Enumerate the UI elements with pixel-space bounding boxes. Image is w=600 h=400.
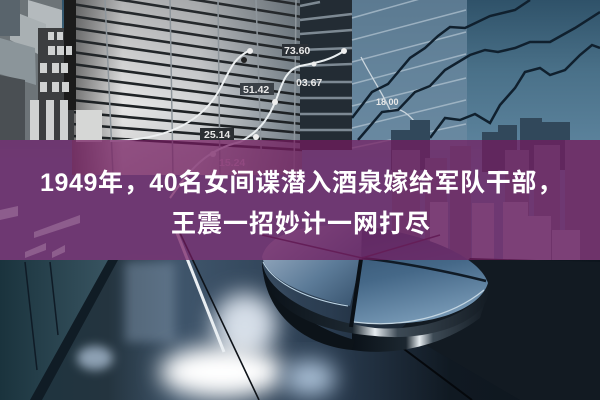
- left stacked panels: [0, 0, 102, 142]
- band left step bars: [0, 206, 80, 258]
- title band: [0, 140, 600, 260]
- background: dark column grid: [300, 0, 467, 150]
- white line chart with value labels: [110, 44, 424, 198]
- white line chart with value labels: 03.67: [296, 77, 322, 89]
- floor seam lines: [177, 233, 472, 400]
- white line chart with value labels: 25.14: [204, 129, 230, 141]
- white line chart with value labels: 18.00: [376, 97, 399, 107]
- floor: [0, 260, 600, 400]
- title text: 1949年，40名女间谍潜入酒泉嫁给军队干部，: [40, 169, 562, 197]
- left wall panels on floor: [25, 260, 118, 400]
- white line chart with value labels: 15.24: [219, 157, 245, 169]
- dark stock lines: [352, 0, 600, 140]
- white line chart with value labels: 51.42: [243, 84, 269, 96]
- right dark stage behind pie: [400, 258, 600, 400]
- pie chart: [262, 225, 488, 352]
- background: striped blinds panel: [72, 0, 302, 175]
- title text: [40, 169, 562, 238]
- white line chart with value labels: 73.60: [284, 45, 310, 57]
- background bars chart: [391, 118, 600, 262]
- title text: 王震一招妙计一网打尽: [171, 210, 430, 238]
